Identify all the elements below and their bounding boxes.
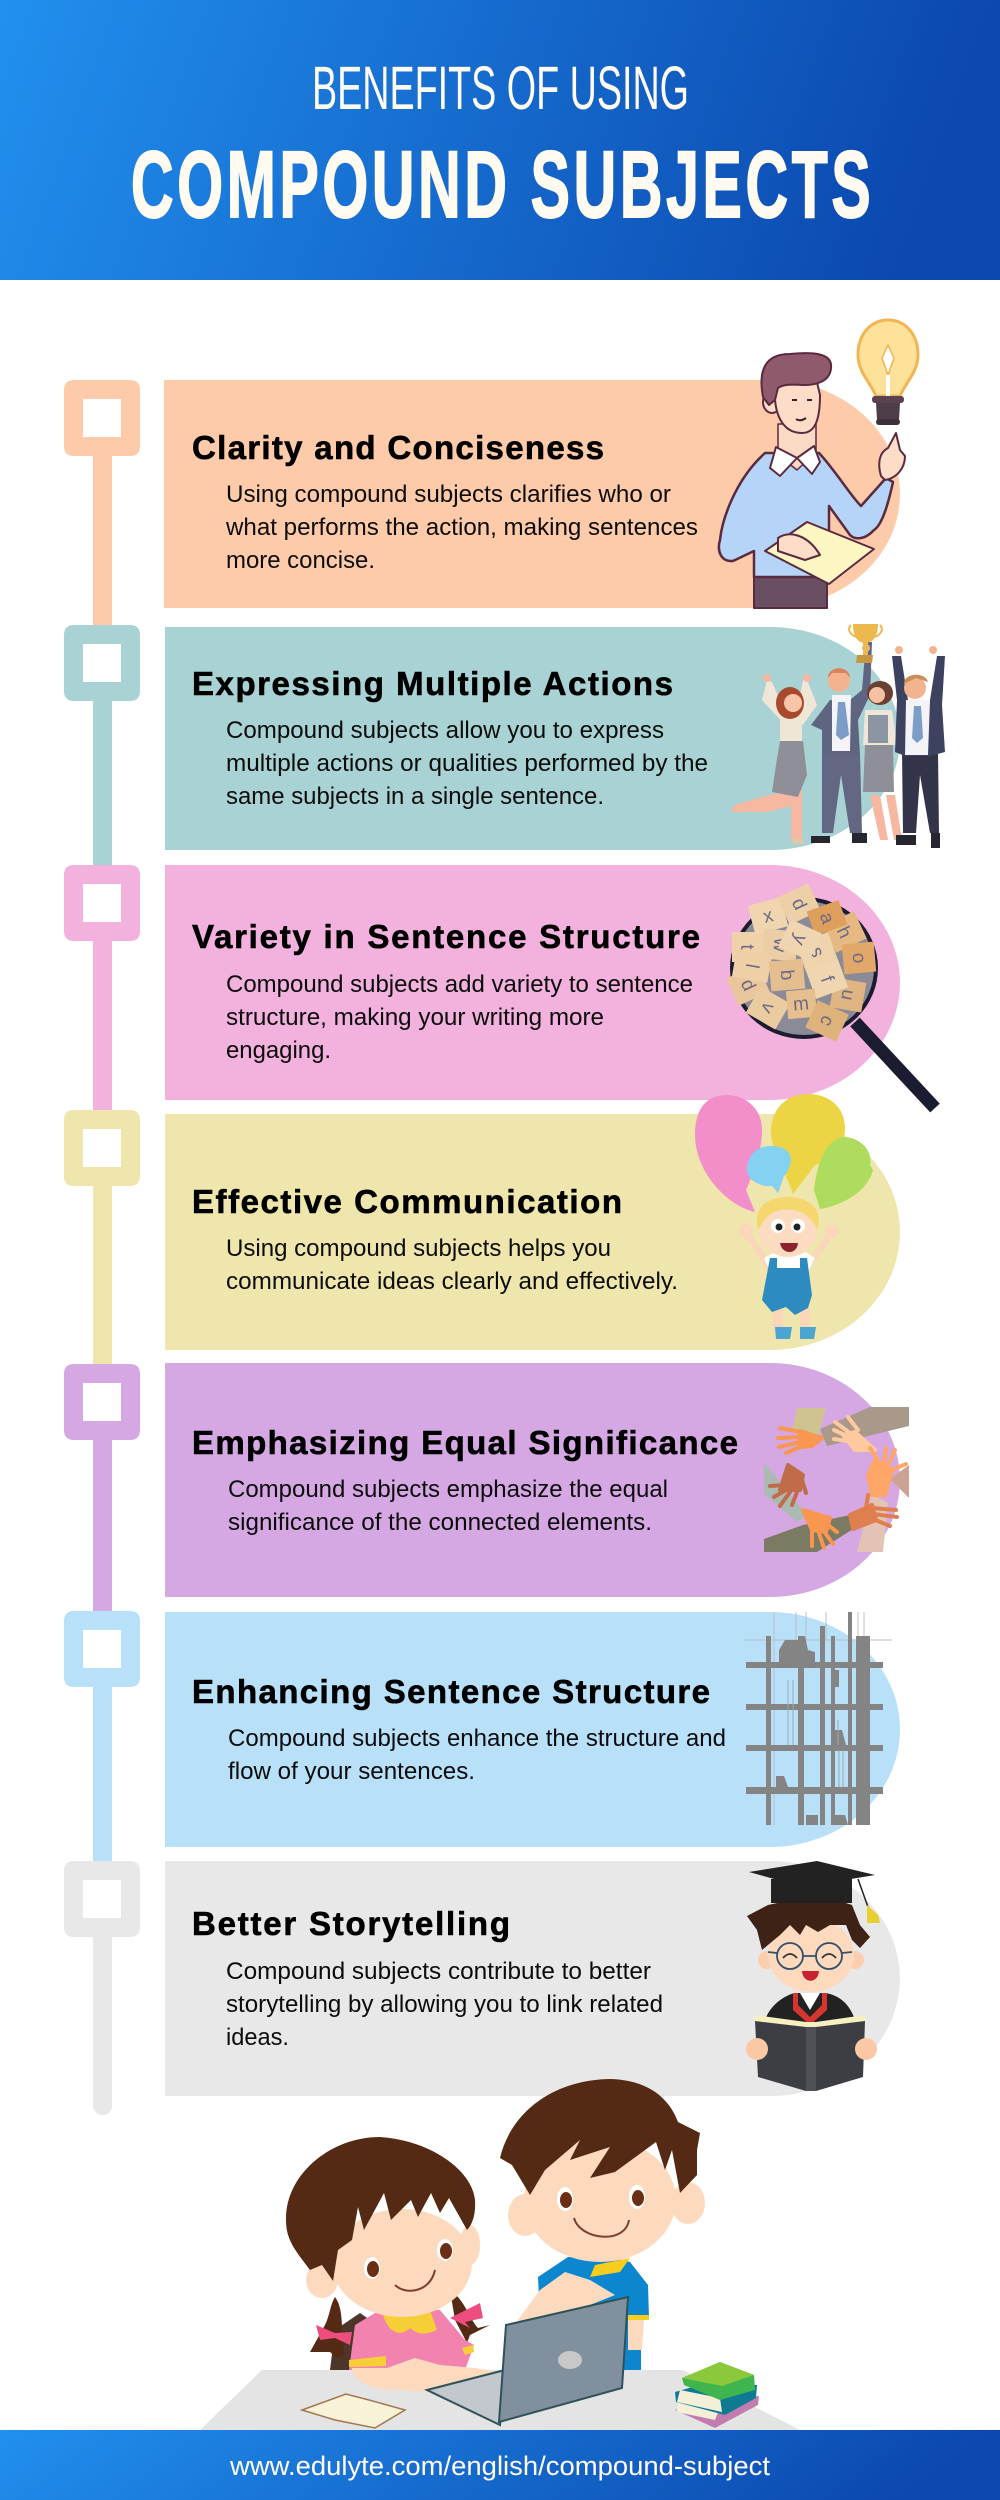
heading: Emphasizing Equal Significance: [192, 1424, 738, 1461]
open book: [302, 2394, 405, 2428]
timeline marker 2: [64, 625, 140, 701]
cap: [749, 1861, 875, 1903]
panel: clarity and conciseness: [164, 380, 900, 608]
icon: man with book and light bulb: [719, 320, 918, 608]
icon: light bulb: [858, 320, 918, 425]
hands: [746, 2038, 877, 2060]
panel: effective communication: [165, 1114, 900, 1350]
speech balloons: [695, 1094, 873, 1212]
body text: more concise.: [226, 547, 375, 574]
heading: Enhancing Sentence Structure: [192, 1673, 710, 1710]
body text: Using compound subjects clarifies who or: [226, 481, 671, 508]
body text: Compound subjects allow you to express: [226, 717, 664, 744]
icon: circle of hands: [764, 1407, 909, 1552]
body text: engaging.: [226, 1037, 331, 1064]
heading: Effective Communication: [192, 1183, 622, 1220]
hand: top right: [834, 1417, 875, 1450]
panel: variety in sentence structure: [165, 865, 900, 1100]
girl smile: [395, 2270, 435, 2291]
boy smile: [574, 2218, 629, 2237]
heading: Clarity and Conciseness: [192, 429, 604, 466]
body text: [228, 1725, 726, 1785]
hand: left: [770, 1465, 806, 1506]
face: [768, 1918, 854, 1992]
body text: significance of the connected elements.: [228, 1509, 652, 1536]
boy arm and hand: [518, 2272, 615, 2345]
woman with folder: [863, 681, 902, 840]
girl shirt: [349, 2310, 474, 2370]
body text: Compound subjects add variety to sentence: [226, 971, 693, 998]
ears: [758, 1951, 776, 1969]
open book: [755, 2015, 865, 2091]
letter tiles: h: [832, 923, 855, 942]
body text: ideas.: [226, 2024, 289, 2051]
panel: better storytelling: [165, 1861, 900, 2096]
icon: graduate reading a book: [746, 1861, 880, 2091]
braids: [310, 2290, 490, 2358]
glasses: [768, 1943, 852, 1969]
body text: structure, making your writing more: [226, 1004, 604, 1031]
letter tiles: x: [761, 905, 776, 928]
hair bows: [316, 2303, 483, 2345]
boy shirt: [538, 2257, 649, 2370]
hair: [747, 1898, 870, 1950]
panel: enhancing sentence structure: [165, 1612, 900, 1847]
magnifier lens: [732, 899, 876, 1037]
body text: Compound subjects enhance the structure and: [228, 1725, 726, 1752]
icon: happy baby with balloons: [695, 1094, 873, 1339]
body text: [228, 1476, 668, 1536]
letter tiles: d: [787, 895, 810, 913]
letter tiles: s: [805, 944, 828, 960]
timeline marker 5: [64, 1364, 140, 1440]
body text: flow of your sentences.: [228, 1758, 475, 1785]
letter tiles: [726, 883, 876, 1042]
sleeves: [764, 1407, 909, 1552]
woman in skirt: [730, 674, 817, 844]
body text: Compound subjects emphasize the equal: [228, 1476, 668, 1503]
man in dark suit: [892, 646, 945, 848]
heading: Variety in Sentence Structure: [192, 918, 700, 955]
chair: [330, 2313, 370, 2370]
body text: storytelling by allowing you to link related: [226, 1991, 663, 2018]
girl arms and hands: [352, 2358, 498, 2392]
letter tiles: a: [815, 910, 838, 927]
medal ribbon: [793, 1993, 827, 2025]
boy face: [524, 2138, 676, 2262]
letter tiles: m: [792, 993, 810, 1016]
title line 2: COMPOUND SUBJECTS: [131, 130, 871, 237]
girl: [286, 2137, 498, 2392]
body text: multiple actions or qualities performed by the: [226, 750, 708, 777]
letter tiles: c: [815, 1012, 838, 1030]
girl eyes: [364, 2239, 453, 2279]
girl face: [332, 2209, 472, 2317]
letter tiles: l: [741, 962, 762, 970]
body text: Using compound subjects helps you: [226, 1235, 611, 1262]
letter tiles: w: [768, 936, 791, 953]
body text: [226, 971, 693, 1064]
hand: right: [868, 1448, 906, 1495]
body text: Compound subjects contribute to better: [226, 1958, 651, 1985]
boy hair: [500, 2079, 700, 2195]
stacked books: [675, 2362, 759, 2428]
timeline marker 6: [64, 1611, 140, 1687]
timeline marker 4: [64, 1110, 140, 1186]
body text: [226, 717, 708, 810]
heading: Expressing Multiple Actions: [192, 665, 673, 702]
magnifier handle: [855, 1022, 935, 1108]
letter tiles: b: [776, 969, 797, 981]
baby: [739, 1197, 839, 1339]
man with trophy: [811, 642, 872, 843]
timeline marker 3: [64, 865, 140, 941]
gown: [765, 1993, 855, 2040]
panel: emphasizing equal significance: [165, 1363, 900, 1597]
boy eyes: [557, 2185, 645, 2211]
body text: communicate ideas clearly and effectively.: [226, 1268, 678, 1295]
boy: [500, 2079, 705, 2370]
letter tiles: y: [788, 931, 811, 949]
body text: [226, 1958, 663, 2051]
timeline marker 7: [64, 1861, 140, 1937]
header banner: [0, 0, 1000, 280]
footer banner: [0, 2430, 1000, 2500]
hand: top left: [778, 1428, 822, 1453]
letter tiles: t: [736, 944, 757, 950]
letter tiles: d: [736, 976, 759, 994]
laptop: [427, 2297, 628, 2425]
timeline: [64, 380, 140, 2115]
body text: [225, 481, 698, 574]
timeline marker 1: [64, 380, 140, 456]
girl ear: [306, 2262, 338, 2298]
letter tiles: f: [816, 973, 838, 986]
body text: [226, 1235, 678, 1295]
illustration: children at a laptop: [200, 2079, 800, 2430]
letter tiles: v: [756, 998, 779, 1018]
letter tiles: u: [836, 988, 859, 1002]
girl hair: [286, 2137, 475, 2281]
table: [200, 2370, 800, 2430]
panel: expressing multiple actions: [165, 627, 900, 850]
tassel: [858, 1879, 880, 1923]
smile: [802, 1971, 819, 1981]
body text: same subjects in a single sentence.: [226, 783, 604, 810]
boy ears: [508, 2194, 542, 2236]
hand: bottom right: [850, 1495, 897, 1529]
body text: what performs the action, making sentences: [225, 514, 698, 541]
icon: building under construction: [744, 1612, 892, 1825]
letter tiles: o: [848, 952, 869, 964]
heading: Better Storytelling: [192, 1905, 510, 1942]
hand: bottom: [803, 1510, 837, 1548]
icon: celebrating team with trophy: [730, 624, 945, 848]
icon: magnifying glass with letter tiles: [726, 883, 935, 1108]
title line 1: BENEFITS OF USING: [312, 54, 689, 122]
website url: www.edulyte.com/english/compound-subject: [229, 2451, 770, 2481]
trophy: [849, 624, 882, 663]
